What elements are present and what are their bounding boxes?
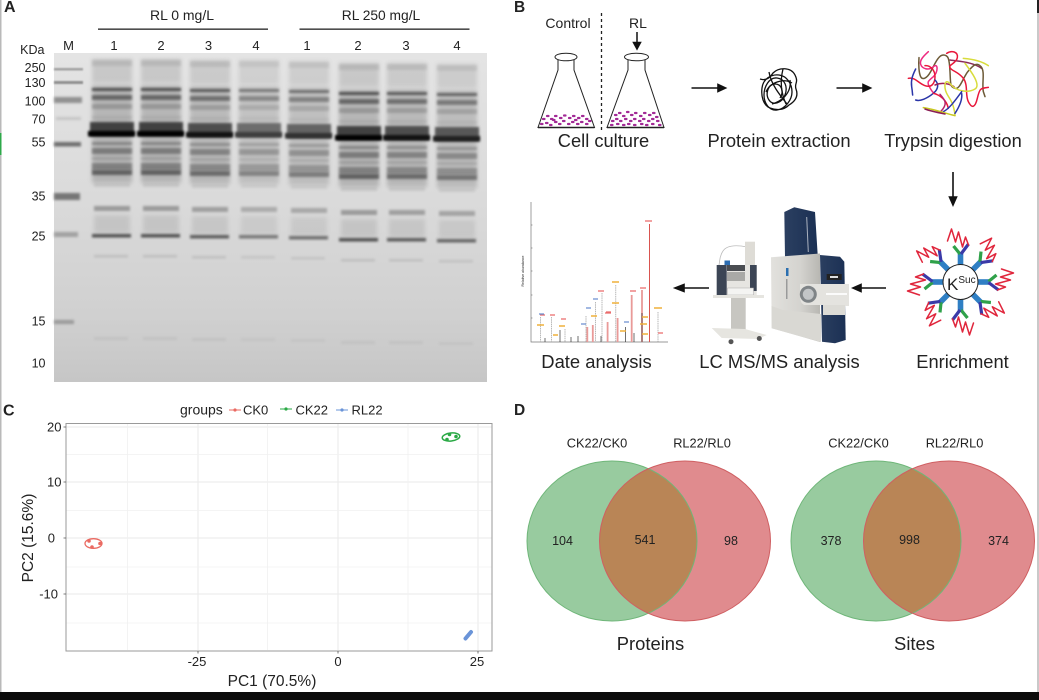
Ksuc label: K <box>947 275 958 294</box>
panel C: PCA plot <box>3 402 492 690</box>
lane labels: 1 <box>110 38 118 53</box>
lane labels: 4 <box>453 38 461 53</box>
icon: antibody beads <box>908 229 1014 335</box>
y axis ticks: 0 <box>48 530 55 546</box>
black peaks <box>545 313 642 342</box>
icon: digested peptides <box>908 52 988 116</box>
x axis ticks: 0 <box>334 654 342 669</box>
Cell culture label: Cell culture <box>558 130 649 151</box>
Trypsin digestion label: Trypsin digestion <box>884 130 1022 151</box>
lane labels: 3 <box>402 38 410 53</box>
lane labels: 2 <box>157 38 165 53</box>
icon: liquid chromatograph <box>712 242 767 344</box>
arrow: to enrichment <box>950 172 956 205</box>
y axis ticks <box>39 420 62 602</box>
panel B: workflow <box>514 0 1022 372</box>
molecular weight labels: 35 <box>32 190 46 204</box>
gel image <box>54 53 487 382</box>
y axis ticks: 10 <box>47 474 62 490</box>
molecular weight labels: 70 <box>32 112 46 126</box>
group heading RL 0 mg/L: RL 0 mg/L <box>150 7 214 23</box>
counts: 378 <box>821 534 841 548</box>
molecular weight labels: 130 <box>25 76 46 90</box>
cluster CK0 <box>85 539 102 549</box>
legend <box>180 402 383 418</box>
counts: 374 <box>988 534 1009 548</box>
arrow: to LC MS/MS <box>853 284 886 292</box>
panel D: Venn diagrams <box>514 402 1034 654</box>
y axis title: PC2 (15.6%) <box>20 494 37 582</box>
Protein extraction label: Protein extraction <box>707 130 851 151</box>
RL label: RL <box>629 15 647 31</box>
arrow: to protein extraction <box>692 84 726 92</box>
panel label D: D <box>514 402 525 419</box>
lane labels: 2 <box>354 38 362 53</box>
bottom black bar <box>0 692 1039 700</box>
chart: mass spectrum <box>521 202 668 342</box>
molecular weight labels: 10 <box>32 356 46 370</box>
y axis ticks: -10 <box>39 586 58 602</box>
axis title: Relative abundance <box>521 255 525 286</box>
Sites caption: Sites <box>894 633 935 654</box>
set labels: RL22/RL0 <box>926 436 983 450</box>
counts: 541 <box>635 533 655 547</box>
image edge strip: left <box>0 0 2 692</box>
cells: RL <box>611 112 660 125</box>
molecular weight labels: 250 <box>25 61 46 75</box>
molecular weight labels: 25 <box>32 230 46 244</box>
set labels: CK22/CK0 <box>828 436 889 450</box>
cells: control <box>541 116 590 125</box>
plot frame and grid <box>64 424 492 654</box>
x axis ticks: -25 <box>188 654 206 669</box>
group heading RL 250 mg/L: RL 250 mg/L <box>342 8 421 23</box>
lane labels: M <box>63 38 74 53</box>
lane labels: 4 <box>252 38 260 53</box>
set labels: CK22/CK0 <box>567 436 627 450</box>
Venn: proteins <box>527 436 770 654</box>
panel A: SDS-PAGE gel <box>4 0 487 382</box>
sample lanes <box>88 59 480 345</box>
lane labels: 3 <box>205 38 212 53</box>
y axis ticks: 20 <box>47 420 62 434</box>
molecular weight labels: 100 <box>25 94 46 108</box>
legend: RL22 <box>352 402 383 418</box>
counts <box>552 533 738 548</box>
cluster RL22 <box>466 632 471 638</box>
icon: mass spectrometer <box>771 207 849 343</box>
counts: 998 <box>899 533 920 547</box>
x axis ticks <box>188 654 484 669</box>
molecular weight labels: KDa <box>20 43 45 57</box>
red peaks <box>648 224 650 342</box>
legend: groups <box>180 402 223 418</box>
Ksuc label: Suc <box>958 275 976 286</box>
molecular weight labels: 55 <box>32 136 46 150</box>
LC MS/MS analysis label: LC MS/MS analysis <box>699 351 860 372</box>
Date analysis label: Date analysis <box>541 351 652 372</box>
peak tags <box>537 282 662 335</box>
dashed divider <box>600 13 602 131</box>
legend: CK0 <box>243 402 268 418</box>
arrow: RL addition <box>634 32 640 49</box>
lane labels: 1 <box>303 38 311 53</box>
set labels <box>567 436 731 450</box>
cluster CK22 <box>442 432 460 442</box>
counts <box>821 533 1009 548</box>
Venn: sites <box>791 436 1034 654</box>
arrow: to data analysis <box>675 284 709 292</box>
molecular weight labels: 15 <box>32 314 46 328</box>
set labels <box>828 436 983 450</box>
x axis ticks: 25 <box>470 654 484 669</box>
molecular weight labels <box>20 43 46 370</box>
Control label: Control <box>545 15 591 31</box>
Enrichment label: Enrichment <box>916 351 1009 372</box>
x axis title: PC1 (70.5%) <box>228 673 316 690</box>
Proteins caption: Proteins <box>617 633 684 654</box>
panel label C: C <box>3 402 15 420</box>
icon: protein tangle <box>760 69 797 110</box>
legend: CK22 <box>296 402 328 418</box>
counts: 98 <box>724 534 738 548</box>
set labels: RL22/RL0 <box>673 436 731 450</box>
image edge strip: right <box>1037 0 1039 692</box>
icon: RL flask <box>607 53 664 128</box>
arrow: to trypsin digestion <box>836 84 870 92</box>
counts: 104 <box>552 534 573 548</box>
icon: control flask <box>538 53 594 128</box>
marker lane bands <box>54 68 83 324</box>
lane labels <box>63 38 461 53</box>
grey peaks <box>541 285 658 342</box>
